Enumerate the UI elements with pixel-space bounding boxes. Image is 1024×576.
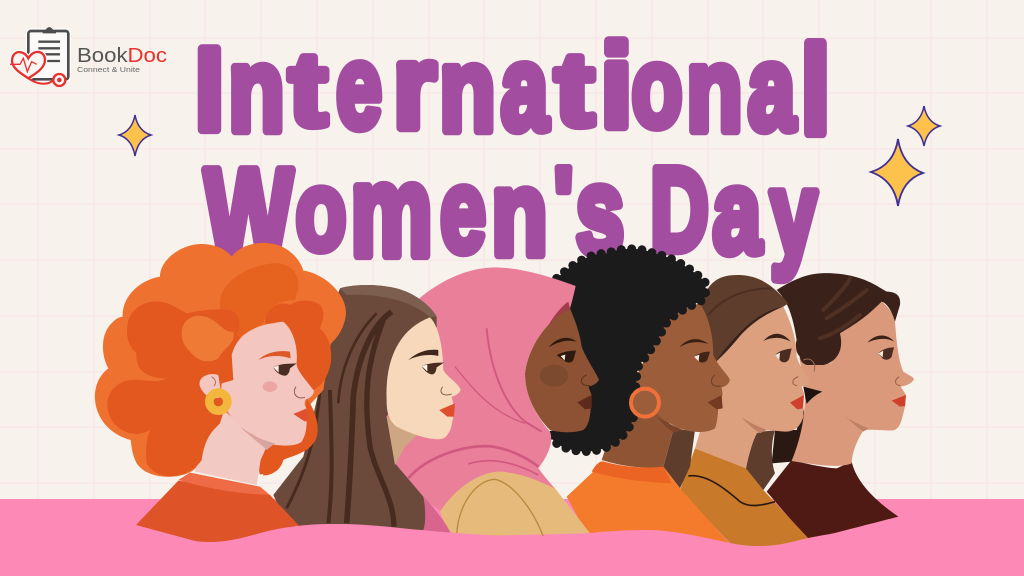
title line 1: l [801, 22, 830, 160]
sparkle top right [908, 106, 940, 146]
title line 1: o [632, 25, 682, 152]
logo: BookDoc: BookDoc [77, 45, 167, 67]
illustration: six women in profile [95, 243, 914, 547]
woman 1: red curly hair, yellow earring [95, 243, 346, 545]
logo: BookDoc [10, 27, 167, 86]
title line 1: I [195, 23, 224, 155]
title line 1: a [748, 22, 796, 156]
pink ground band [0, 499, 1024, 576]
woman 4: black curly hair, orange top, hoop earring [552, 249, 730, 544]
woman 3: pink hijab and tan jacket [387, 267, 599, 537]
title line 2: ' [553, 148, 574, 254]
title line 1: i [601, 20, 632, 152]
title line 2: s [576, 143, 624, 281]
title line 1: t [289, 32, 327, 148]
title line 1 [195, 20, 830, 160]
sparkle left [119, 115, 151, 156]
title line 2: e [440, 145, 486, 277]
title line 1: a [501, 22, 549, 156]
title line 1: n [228, 23, 285, 156]
title line 2: m [351, 139, 432, 283]
woman 2: long brown hair [273, 285, 461, 535]
title line 2: y [770, 148, 817, 280]
logo: BookDoc: Connect & Unite [77, 65, 140, 74]
title line 2 [205, 139, 817, 287]
sparkle large right [871, 139, 923, 206]
title line 1: n [686, 23, 743, 156]
pink wave foreground [0, 517, 1024, 576]
woman 5: brown hair and ochre jacket [663, 275, 809, 547]
title line 2: W [205, 142, 293, 287]
title line 2: n [491, 145, 548, 280]
title line 1: n [439, 23, 496, 156]
title line 2: o [296, 148, 346, 273]
title line 1: r [393, 20, 436, 153]
title line 2: D [650, 143, 709, 276]
woman 6: dark hair and maroon sweater [767, 273, 914, 540]
title line 2: a [713, 145, 762, 277]
title: International Women's Day [195, 20, 830, 287]
title line 1: e [336, 21, 382, 153]
title line 1: t [555, 32, 594, 148]
